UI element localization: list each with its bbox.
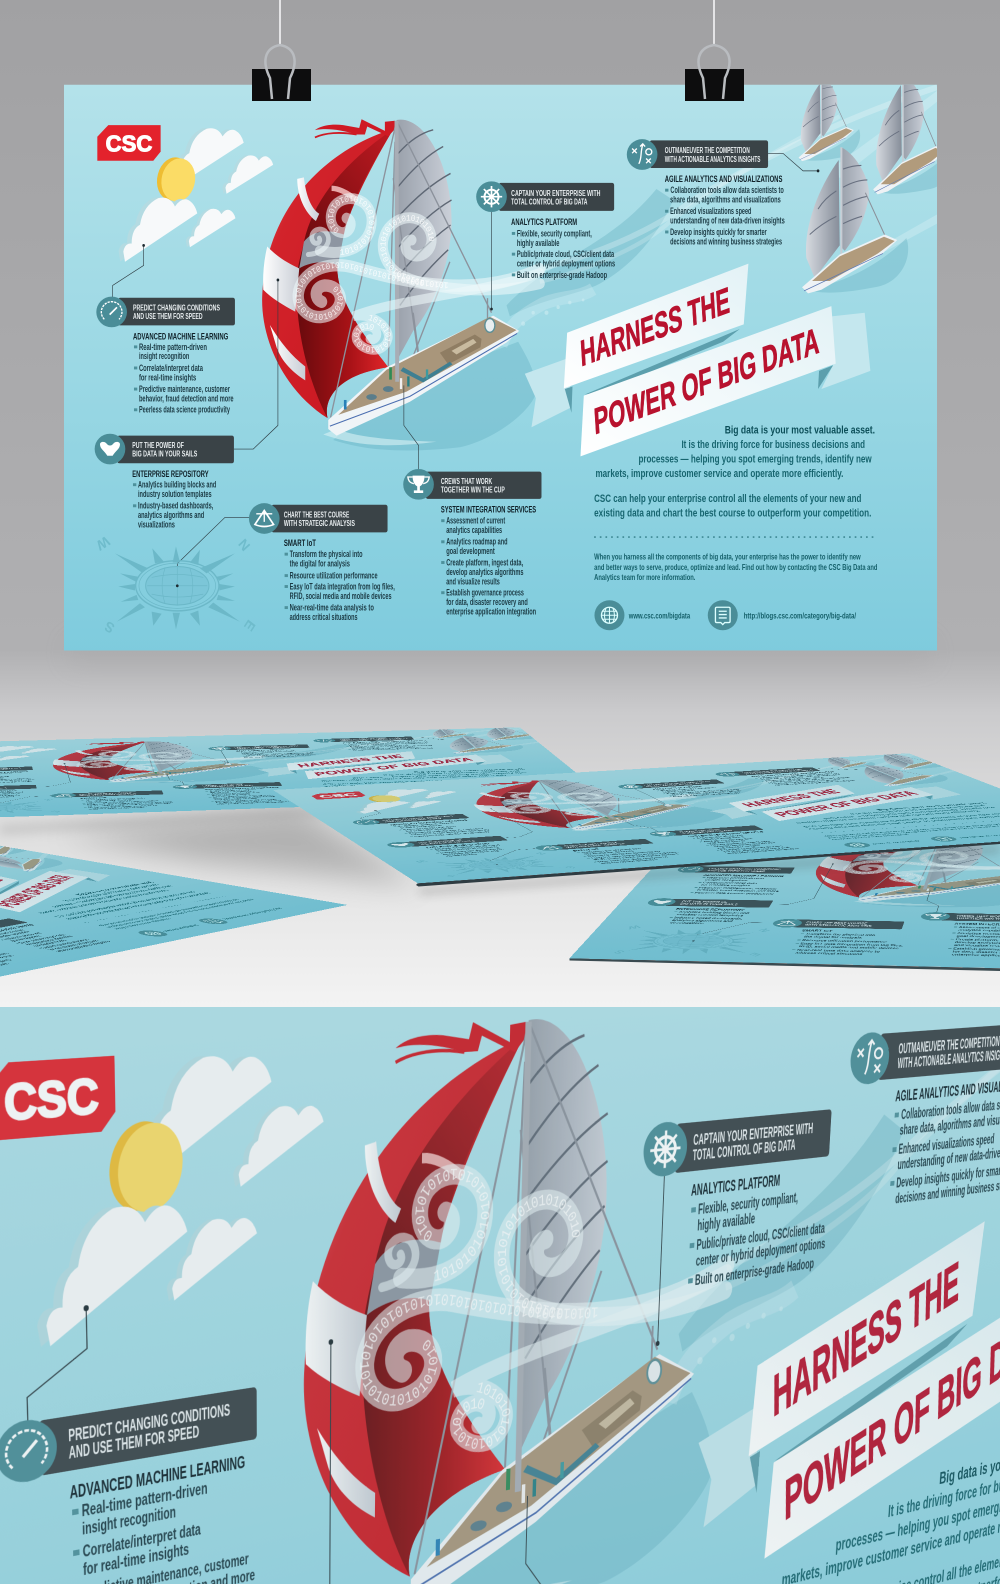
- panel: crews that work together: [403, 469, 541, 617]
- panel: put the power in your sails: ENTERPRISE REPOSITORY: [132, 469, 209, 479]
- icon: sextant: [249, 503, 280, 534]
- left clip: [252, 0, 311, 101]
- spinnaker: [262, 129, 393, 418]
- panel: chart the best course: Transform the physical into: [290, 549, 363, 559]
- icon: trophy: [403, 469, 434, 500]
- panel: captain your enterprise: highly available: [517, 237, 560, 248]
- panel: chart the best course: Near-real-time data analysis to: [290, 602, 374, 613]
- blog link: [708, 600, 857, 630]
- panel: outmaneuver the competition: Collaboration tools allow data scientists to: [670, 185, 784, 195]
- intro text block: CSC can help your enterprise control all the elements of your new and: [594, 492, 861, 505]
- mockup sheet: front left: [0, 841, 348, 1011]
- intro text block: markets, improve customer service and operate more efficiently.: [595, 468, 843, 480]
- panel: crews that work together: TOGETHER WIN THE CUP: [441, 485, 505, 494]
- ribbon folds: [565, 329, 833, 413]
- three grey competitor boats: [799, 75, 954, 293]
- binary digits on swirls: 10101010101010101010: [352, 313, 393, 354]
- compass rose: S: [102, 618, 117, 637]
- pennant: [315, 119, 395, 137]
- panel: outmaneuver the competition: AGILE ANALYTICS AND VISUALIZATIONS: [665, 173, 783, 184]
- panel: put the power in your sails: industry solution templates: [138, 489, 212, 499]
- panel: crews that work together: Create platform, ingest data,: [446, 557, 523, 568]
- rigging: [331, 122, 492, 417]
- heading: harness the: [564, 264, 748, 388]
- panel: chart the best course: [249, 503, 395, 622]
- panel: crews that work together: SYSTEM INTEGRATION SERVICES: [441, 504, 536, 514]
- compass rose: N: [235, 535, 253, 554]
- intro text block: Big data is your most valuable asset.: [725, 424, 875, 437]
- icon: globe: [594, 600, 624, 630]
- panel: put the power in your sails: analytics algorithms and: [138, 510, 204, 520]
- panel: predict changing conditions: Predictive maintenance, customer: [139, 384, 230, 394]
- panel: chart the best course: RFID, social media and mobile devices: [290, 591, 392, 601]
- panel: outmaneuver the competition: [627, 139, 785, 247]
- panel: outmaneuver the competition: Develop insights quickly for smarter: [670, 227, 767, 237]
- panel: predict changing conditions: [96, 297, 235, 415]
- close-up panel: perspective crop of the poster: [0, 848, 1000, 1584]
- panel: chart the best course: CHART THE BEST COURSE: [284, 510, 350, 520]
- panel: put the power in your sails: BIG DATA IN YOUR SAILS: [132, 449, 198, 458]
- compass rose: W: [93, 533, 112, 555]
- panel: captain your enterprise: CAPTAIN YOUR ENTERPRISE WITH: [511, 189, 601, 198]
- mockup sheet: front right: [569, 823, 1000, 979]
- panel: put the power in your sails: Analytics building blocks and: [138, 479, 216, 490]
- panel: predict changing conditions: Correlate/interpret data: [139, 363, 203, 373]
- panel: crews that work together: goal development: [446, 546, 495, 556]
- heading: harness the: HARNESS THE: [579, 279, 731, 375]
- CSC logo: CSC: [106, 131, 152, 157]
- ribbon tails: [525, 313, 870, 427]
- right clip: [685, 0, 744, 101]
- panel: crews that work together: enterprise application integration: [446, 606, 536, 617]
- panel: predict changing conditions: insight recognition: [139, 351, 189, 361]
- wind swirls: [298, 199, 540, 350]
- panel: captain your enterprise: TOTAL CONTROL OF BIG DATA: [511, 197, 588, 207]
- panel: outmaneuver the competition: Enhanced visualizations speed: [670, 206, 751, 216]
- panel: crews that work together: Assessment of current: [446, 515, 505, 526]
- panel: captain your enterprise: Flexible, security compliant,: [517, 228, 592, 238]
- panel: chart the best course: SMART IoT: [284, 537, 316, 548]
- blog link: http://blogs.csc.com/category/big-data/: [744, 611, 857, 621]
- icon: flexed muscle: [95, 434, 125, 464]
- website link: [594, 600, 691, 630]
- panel: crews that work together: Analytics roadmap and: [446, 536, 508, 547]
- panel: captain your enterprise: [476, 181, 615, 280]
- boat shadow and sea wake: [323, 87, 937, 450]
- closing text block: Analytics team for more information.: [594, 573, 695, 582]
- panel: predict changing conditions: PREDICT CHANGING CONDITIONS: [133, 303, 220, 313]
- panel: outmaneuver the competition: understanding of new data-driven insights: [670, 215, 785, 226]
- panel: crews that work together: and visualize results: [446, 576, 500, 586]
- icon: playbook: [627, 139, 657, 170]
- panel: captain your enterprise: Public/private cloud, CSC/client data: [517, 249, 614, 259]
- icon: ship wheel: [476, 181, 507, 212]
- panel: put the power in your sails: [95, 434, 234, 530]
- panel: outmaneuver the competition: decisions and winning business strategies: [670, 236, 782, 247]
- panel: put the power in your sails: visualizations: [138, 519, 175, 530]
- panel: crews that work together: CREWS THAT WORK: [441, 477, 492, 486]
- panel: predict changing conditions: ADVANCED MACHINE LEARNING: [133, 331, 228, 342]
- panel: put the power in your sails: PUT THE POWER OF: [132, 441, 184, 450]
- compass rose: [93, 533, 259, 637]
- main poster: [64, 85, 937, 651]
- CSC logo: [97, 125, 161, 161]
- binary digits on swirls: [293, 192, 449, 354]
- heading: power of big data: POWER OF BIG DATA: [593, 319, 820, 443]
- panel: captain your enterprise: center or hybrid deployment options: [517, 258, 615, 269]
- heading: power of big data: [580, 306, 836, 456]
- panel: crews that work together: for data, disaster recovery and: [446, 597, 528, 607]
- leader dots: [142, 169, 819, 311]
- panel: crews that work together: develop analytics algorithms: [446, 567, 524, 577]
- panel: outmaneuver the competition: WITH ACTIONABLE ANALYTICS INSIGHTS: [665, 154, 761, 164]
- panel: outmaneuver the competition: OUTMANEUVER THE COMPETITION: [665, 146, 750, 155]
- panel: predict changing conditions: Real-time pattern-driven: [139, 341, 207, 352]
- icon: blog page: [708, 600, 738, 630]
- binary digits on swirls: 1010101010101010101010101010: [379, 213, 436, 288]
- crew: [344, 367, 428, 409]
- panel: crews that work together: Establish governance process: [446, 587, 524, 598]
- panel: predict changing conditions: for real-time insights: [139, 372, 197, 382]
- closing text block: When you harness all the components of big data, your enterprise has the power to identify new: [594, 552, 861, 562]
- mockup sheet: centre: [273, 753, 1000, 883]
- compass rose: E: [241, 617, 259, 634]
- panel: captain your enterprise: ANALYTICS PLATFORM: [511, 217, 577, 227]
- poster background: [60, 80, 940, 655]
- binary digits on swirls: 10101010101010101010101010101010101010101010101010: [293, 259, 449, 323]
- panel: put the power in your sails: Industry-based dashboards,: [138, 500, 213, 511]
- mainsail: [397, 120, 452, 360]
- mast: [391, 121, 403, 382]
- panel: chart the best course: Resource utilization performance: [290, 570, 378, 581]
- intro text block: [594, 424, 875, 519]
- panel: predict changing conditions: behavior, fraud detection and more: [139, 393, 234, 404]
- intro text block: processes — helping you spot emerging trends, identify new: [638, 453, 872, 466]
- intro text block: It is the driving force for business decisions and: [681, 439, 865, 451]
- panel: predict changing conditions: AND USE THEM FOR SPEED: [133, 312, 203, 321]
- website link: www.csc.com/bigdata: [628, 611, 691, 621]
- panel: captain your enterprise: Built on enterprise-grade Hadoop: [517, 269, 607, 280]
- panel: chart the best course: address critical situations: [290, 612, 358, 622]
- sailboat illustration: [262, 119, 540, 436]
- panel: crews that work together: analytics capabilities: [446, 525, 502, 535]
- closing text block: [594, 552, 878, 582]
- panel: chart the best course: the digital for analysis: [290, 558, 350, 569]
- panel: outmaneuver the competition: share data, algorithms and visualizations: [670, 194, 781, 205]
- title ribbon: [525, 264, 870, 456]
- panel: chart the best course: Easy IoT data integration from log files,: [290, 581, 395, 592]
- intro text block: existing data and chart the best course to outperform your competition.: [594, 507, 871, 519]
- icon: speedometer: [96, 297, 127, 327]
- clouds and sun: [119, 128, 273, 262]
- hull and deck: [328, 316, 519, 436]
- panel: predict changing conditions: Peerless data science productivity: [139, 404, 230, 415]
- binary digits on swirls: 10101010101010101010101010: [325, 192, 377, 258]
- leader lines: [113, 153, 818, 586]
- panel: chart the best course: WITH STRATEGIC ANALYSIS: [284, 518, 355, 528]
- mockup sheet: back left: [0, 727, 606, 821]
